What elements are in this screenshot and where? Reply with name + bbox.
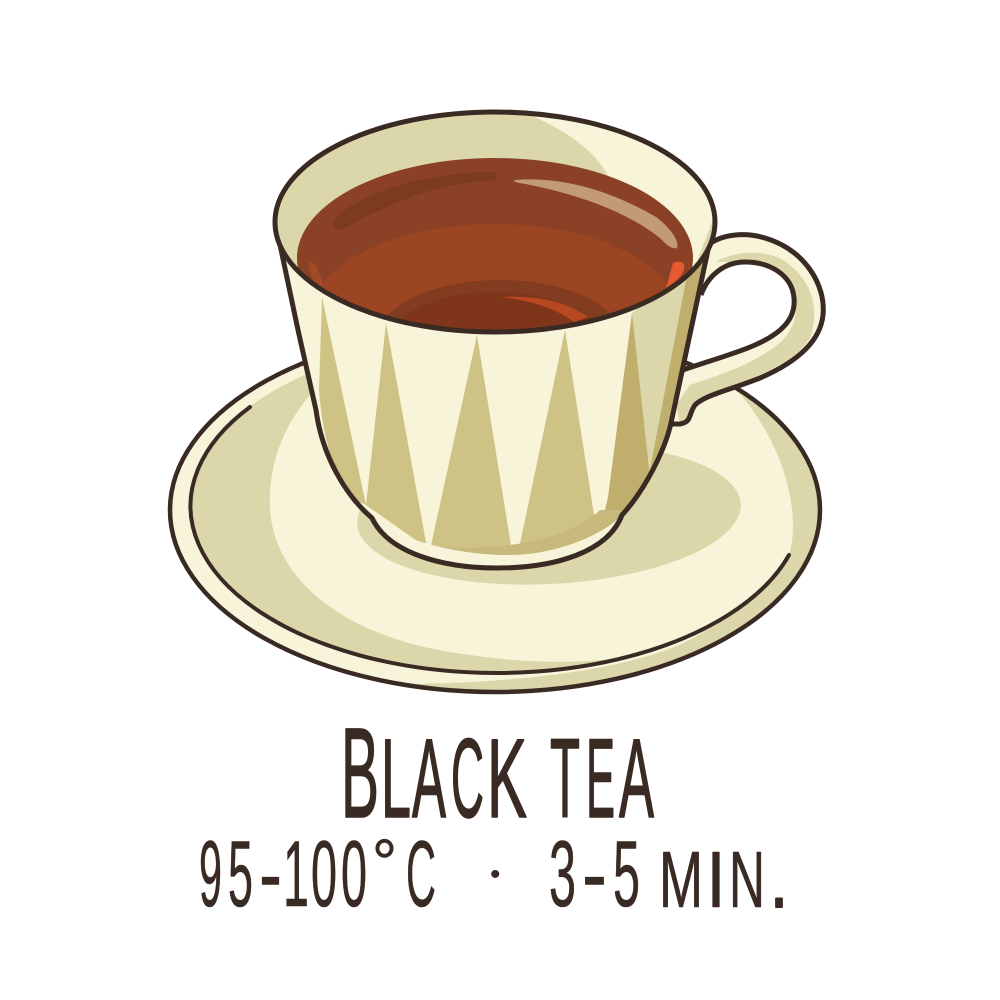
left glint (309, 262, 323, 286)
title: L (381, 716, 411, 841)
brewing temperature and time: - (259, 821, 282, 926)
brewing temperature and time: • (490, 858, 501, 891)
red glint (666, 262, 684, 288)
brewing temperature and time: 5 (228, 821, 253, 926)
dark ring (388, 280, 610, 319)
tea surface (297, 158, 693, 286)
saucer well (191, 338, 803, 672)
title: T (550, 716, 580, 841)
triangle pattern (319, 297, 366, 505)
brewing temperature and time: I (706, 835, 726, 924)
cup shadow on saucer (354, 434, 744, 594)
brewing temperature and time: 9 (199, 821, 222, 926)
cup inner wall (275, 112, 715, 332)
rim outline (275, 112, 715, 332)
title: A (412, 716, 446, 841)
saucer well highlight (270, 394, 793, 662)
text: A (619, 716, 654, 841)
base shade (436, 510, 623, 555)
inner wall highlight (533, 116, 712, 268)
brewing temperature and time: - (582, 821, 607, 926)
saucer (170, 328, 820, 693)
brewing temperature and time: 1 (283, 821, 309, 926)
cup handle (672, 235, 823, 424)
title: K (487, 716, 527, 841)
light highlight (514, 179, 677, 248)
orange glint bottom (499, 297, 588, 322)
title: B (341, 702, 379, 845)
saucer rim shade (395, 388, 820, 693)
brewing temperature and time: 0 (341, 821, 367, 926)
saucer inner line (190, 407, 789, 673)
brewing temperature and time: 5 (613, 821, 640, 926)
cup inside and tea (272, 110, 718, 334)
title: C (451, 716, 484, 841)
brewing temperature and time: ° (372, 825, 397, 899)
tea depth (323, 224, 669, 316)
cup bottom (390, 292, 600, 392)
cup foot (372, 500, 622, 568)
title: E (586, 716, 615, 841)
saucer outline (170, 328, 820, 692)
saucer outer rim (170, 328, 820, 692)
cup body (279, 240, 712, 568)
brewing temperature and time: M (659, 835, 703, 924)
dark highlight (333, 172, 498, 229)
brewing temperature and time: 0 (311, 821, 337, 926)
right side shade (632, 280, 686, 472)
brewing temperature and time (199, 821, 788, 926)
brewing temperature and time: 3 (549, 821, 576, 926)
brewing temperature and time: C (406, 821, 436, 926)
title (341, 702, 654, 845)
brewing temperature and time: . (770, 835, 788, 924)
brewing temperature and time: N (729, 835, 765, 924)
